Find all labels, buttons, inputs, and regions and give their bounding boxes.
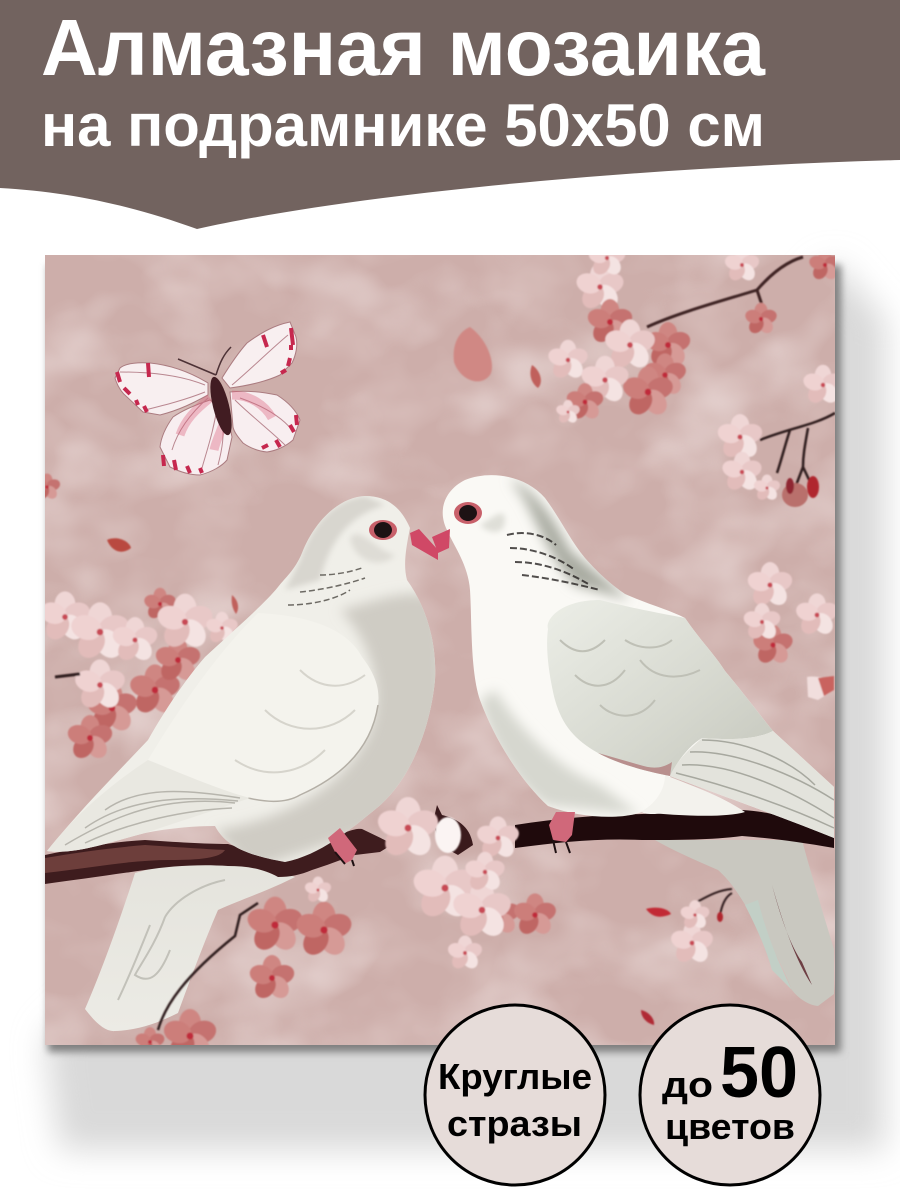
- badge: up to 50 colours: [640, 1005, 820, 1185]
- dove feet: [328, 812, 575, 866]
- subtitle: на подрамнике 50х50 см: [41, 92, 765, 159]
- blossom cluster: branch centre: [375, 797, 558, 971]
- left dove: [47, 496, 445, 870]
- right dove belly: [640, 775, 745, 816]
- painting: doves and cherry blossom: [32, 239, 845, 1064]
- left dove beak: [410, 529, 438, 560]
- butterfly: [115, 322, 300, 475]
- badge: up to 50 colours: 50: [720, 1033, 798, 1113]
- canvas shadow: [45, 262, 885, 1150]
- blossom cluster: bottom right: [669, 889, 732, 966]
- falling petals: [107, 327, 671, 1025]
- badge: up to 50 colours: цветов: [665, 1106, 795, 1147]
- right dove: [432, 475, 834, 838]
- right dove beak: [432, 529, 450, 553]
- right dove cheek: [480, 514, 505, 532]
- left dove neck speckles: [288, 568, 365, 605]
- title: Алмазная мозаика: [41, 3, 765, 92]
- badge: round rhinestones: [425, 1005, 605, 1185]
- dove lower tails: [85, 840, 834, 1031]
- badge: up to 50 colours: до: [662, 1064, 713, 1105]
- badge: round rhinestones: стразы: [447, 1103, 582, 1144]
- header banner: [0, 0, 900, 229]
- badge: round rhinestones: Круглые: [438, 1056, 592, 1097]
- blossom cluster: left: [32, 474, 239, 762]
- right dove wing: [547, 600, 834, 838]
- blossom cluster: bottom left: [135, 876, 352, 1045]
- blossom cluster: right side: [715, 365, 845, 700]
- branch: [45, 805, 834, 884]
- painting background: [45, 255, 835, 1045]
- blossom cluster: top right: [548, 255, 835, 424]
- left dove cheek: [350, 534, 395, 562]
- left dove wing: [47, 656, 379, 852]
- right dove eye: [454, 502, 482, 524]
- right dove neck speckles: [507, 533, 600, 590]
- left dove eye: [369, 520, 397, 540]
